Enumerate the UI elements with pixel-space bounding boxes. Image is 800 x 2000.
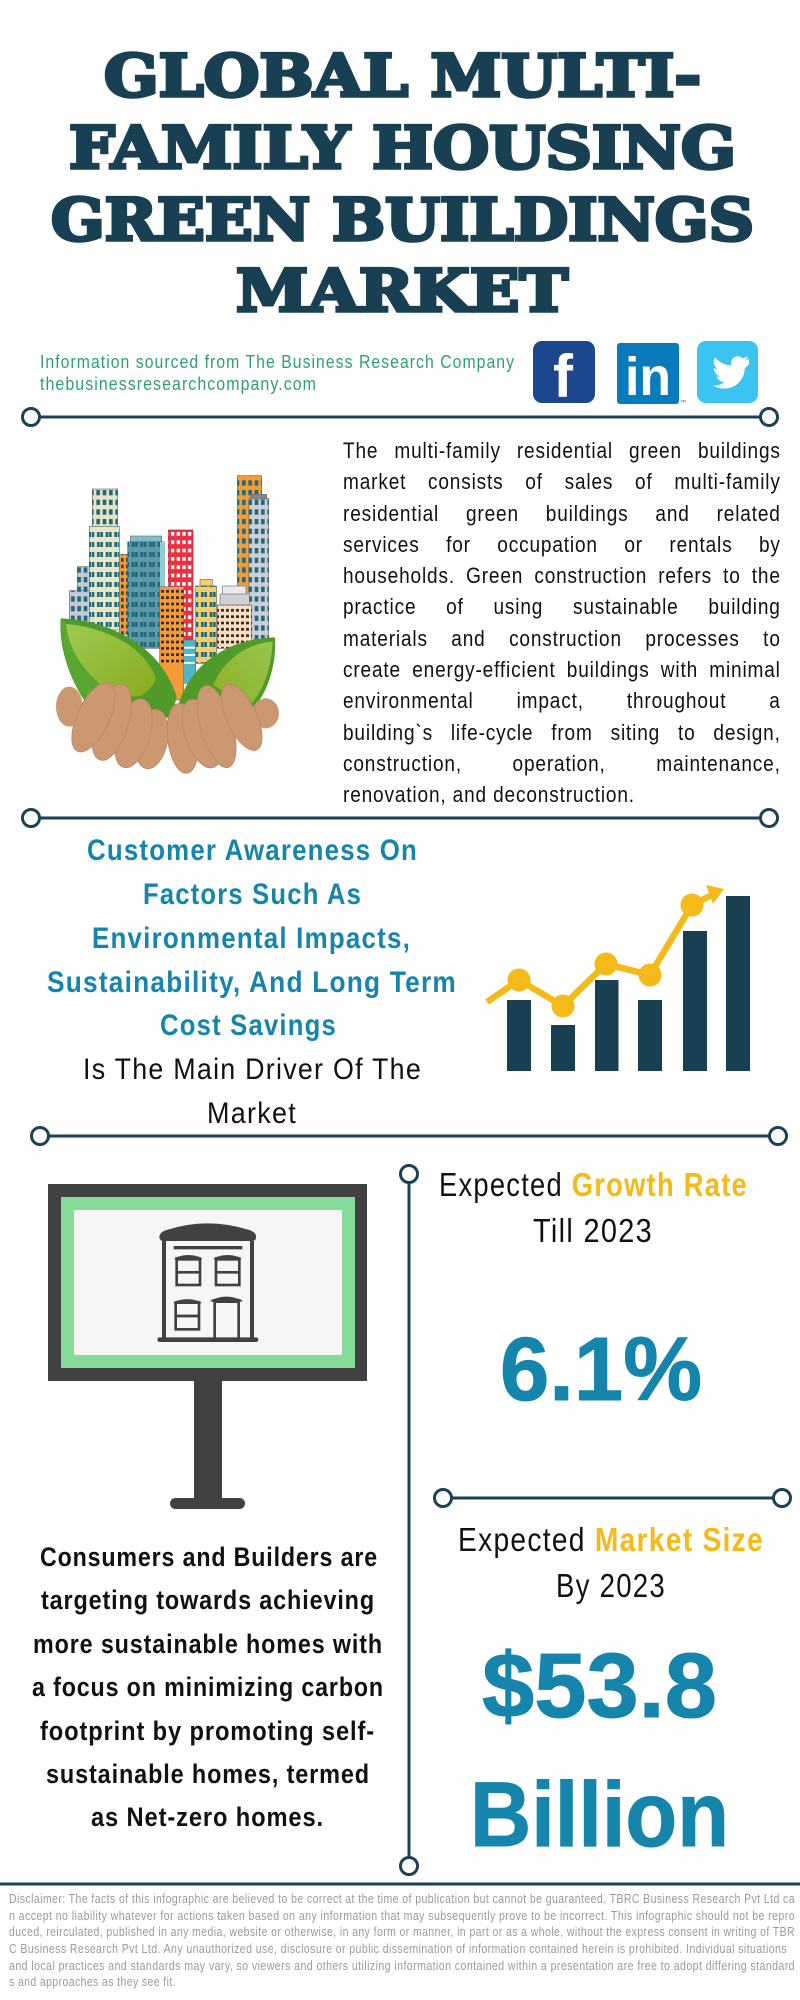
consumers and builders text	[32, 1542, 384, 1832]
title: GREEN BUILDINGS	[51, 186, 754, 254]
consumers and builders text: as Net-zero homes.	[91, 1802, 324, 1832]
icon: facebook: f	[553, 343, 574, 410]
market driver heading: Is The Main Driver Of The	[83, 1053, 422, 1086]
leaf right	[177, 637, 275, 713]
consumers and builders text: Consumers and Builders are	[40, 1542, 378, 1572]
market description paragraph: market consists of sales of multi-family	[343, 469, 781, 494]
consumers and builders text: targeting towards achieving	[41, 1585, 375, 1615]
illustration: city in hands with leaves	[56, 476, 279, 775]
market driver heading: Environmental Impacts,	[92, 922, 411, 955]
market driver heading: Market	[207, 1097, 297, 1130]
buildings	[69, 476, 269, 700]
market description paragraph: building`s life-cycle from siting to design,	[343, 720, 781, 745]
market size value: $53.8	[482, 1635, 717, 1737]
growth rate label: Expected Growth Rate	[439, 1166, 748, 1203]
market driver heading	[47, 834, 457, 1130]
market description paragraph	[343, 438, 781, 807]
source attribution	[40, 352, 515, 394]
hands	[56, 677, 279, 775]
footer rule	[0, 1882, 800, 1886]
consumers and builders text: a focus on minimizing carbon	[32, 1672, 384, 1702]
market description paragraph: renovation, and deconstruction.	[343, 782, 635, 807]
source attribution: thebusinessresearchcompany.com	[40, 374, 317, 394]
source attribution: Information sourced from The Business Research Company	[40, 352, 515, 372]
market description paragraph: households. Green construction refers to the	[343, 563, 781, 588]
consumers and builders text: sustainable homes, termed	[46, 1759, 370, 1789]
market size value: Billion	[470, 1764, 729, 1866]
market size label: By 2023	[556, 1567, 666, 1604]
divider: intro	[22, 810, 778, 826]
market description paragraph: construction, operation, maintenance,	[343, 751, 781, 776]
divider: header	[22, 408, 778, 426]
market description paragraph: create energy-efficient buildings with minimal	[343, 657, 781, 682]
market description paragraph: The multi-family residential green buildings	[343, 438, 781, 463]
market driver heading: Cost Savings	[160, 1009, 337, 1042]
growth rate value: 6.1%	[500, 1320, 702, 1420]
consumers and builders text: more sustainable homes with	[33, 1629, 383, 1659]
divider: metrics	[434, 1490, 790, 1506]
market size value	[470, 1635, 729, 1866]
title: GLOBAL MULTI-	[104, 42, 701, 110]
icon: linkedin: ™	[680, 399, 686, 406]
market description paragraph: materials and construction processes to	[343, 626, 781, 651]
disclaimer	[9, 1892, 795, 1989]
market driver heading: Sustainability, And Long Term	[47, 966, 457, 999]
title: MARKET	[236, 257, 568, 325]
growth rate label	[439, 1166, 748, 1249]
growth rate label: Till 2023	[533, 1212, 653, 1249]
title: FAMILY HOUSING	[69, 114, 736, 182]
consumers and builders text: footprint by promoting self-	[40, 1716, 375, 1746]
title	[51, 42, 754, 325]
divider: driver	[32, 1128, 786, 1144]
market driver heading: Factors Such As	[143, 878, 362, 911]
market size label	[458, 1521, 764, 1604]
leaf left	[60, 618, 177, 718]
market description paragraph: services for occupation or rentals by	[343, 532, 781, 557]
market description paragraph: residential green buildings and related	[343, 501, 781, 526]
icon: facebook	[533, 341, 595, 410]
market size label: Expected Market Size	[458, 1521, 764, 1558]
icon: billboard with building	[48, 1184, 367, 1509]
disclaimer: s and approaches as they see fit.	[9, 1975, 176, 1989]
market description paragraph: environmental impact, throughout a	[343, 688, 781, 713]
vertical divider	[400, 1166, 418, 1874]
icon: linkedin	[617, 343, 686, 407]
market description paragraph: practice of using sustainable building	[343, 594, 781, 619]
chart: rising bars with trend line	[487, 885, 750, 1071]
market driver heading: Customer Awareness On	[87, 834, 418, 867]
icon: linkedin: in	[625, 347, 671, 407]
icon: twitter	[697, 341, 758, 403]
